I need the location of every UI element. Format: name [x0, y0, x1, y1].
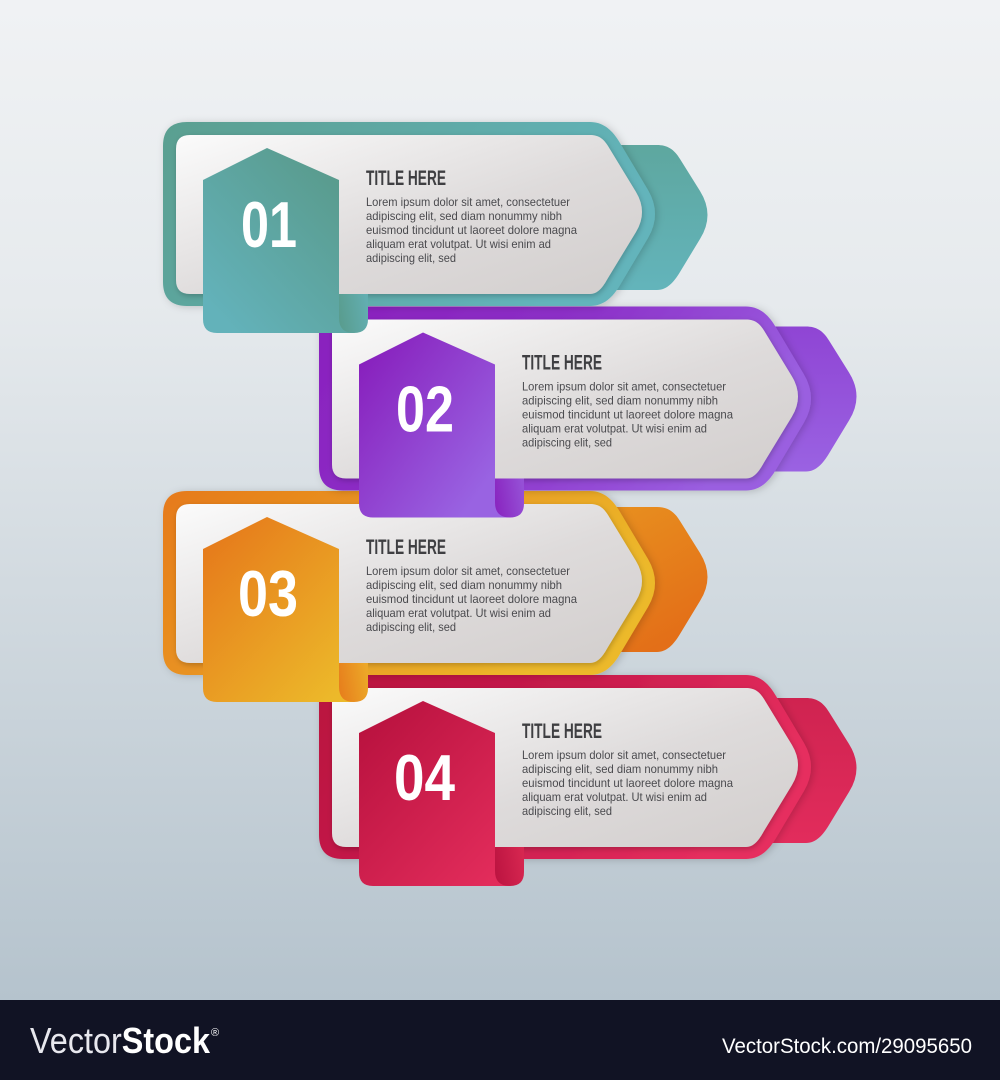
text block 03: adipiscing elit, sed [366, 621, 456, 634]
icon: fold 02 [491, 478, 524, 518]
number 03: 03 [238, 557, 298, 630]
card frame 01 [163, 122, 655, 306]
badge 04 [359, 701, 510, 886]
text block 04: adipiscing elit, sed diam nonummy nibh [522, 763, 718, 776]
text block 04: aliquam erat volutpat. Ut wisi enim ad [522, 791, 707, 804]
text block 02: adipiscing elit, sed diam nonummy nibh [522, 394, 718, 408]
icon: fold 03 [335, 663, 368, 702]
arrow: back chevron 03 [605, 507, 708, 652]
number 02: 02 [396, 372, 454, 446]
text block 01: adipiscing elit, sed [366, 252, 456, 265]
text block 04: euismod tincidunt ut laoreet dolore magna [522, 777, 734, 790]
icon: fold 04 [491, 847, 524, 886]
footer url: VectorStock.com/29095650 [722, 1035, 972, 1058]
card frame 03 [163, 491, 655, 675]
text block 02: aliquam erat volutpat. Ut wisi enim ad [522, 422, 707, 436]
number 04: 04 [394, 741, 455, 814]
text block 04: Lorem ipsum dolor sit amet, consectetuer [522, 749, 726, 762]
badge 01 [203, 148, 354, 333]
card body 03 [176, 504, 642, 663]
heading 01: TITLE HERE [366, 167, 446, 190]
icon: fold 01 [335, 294, 368, 333]
badge 02 [359, 332, 510, 518]
text block 01: aliquam erat volutpat. Ut wisi enim ad [366, 238, 551, 251]
text block 01 [366, 196, 578, 265]
text block 02: euismod tincidunt ut laoreet dolore magna [522, 408, 734, 422]
card body 04 [332, 688, 798, 847]
text block 02: Lorem ipsum dolor sit amet, consectetuer [522, 380, 726, 394]
number 01: 01 [241, 188, 297, 261]
footer bar [0, 1000, 1000, 1080]
card frame 02 [319, 306, 811, 490]
panel: step 02 [319, 306, 856, 518]
arrow: back chevron 01 [605, 145, 708, 290]
card body 02 [332, 320, 798, 478]
text block 03: aliquam erat volutpat. Ut wisi enim ad [366, 607, 551, 620]
text block 04: adipiscing elit, sed [522, 805, 612, 818]
arrow: back chevron 04 [761, 698, 856, 843]
panel: step 04 [319, 675, 856, 886]
card body 01 [176, 135, 642, 294]
text block 03: adipiscing elit, sed diam nonummy nibh [366, 579, 562, 592]
text block 04 [522, 749, 734, 818]
text block 03 [366, 565, 578, 634]
text block 02 [522, 380, 734, 450]
heading 03: TITLE HERE [366, 536, 446, 559]
text block 03: Lorem ipsum dolor sit amet, consectetuer [366, 565, 570, 578]
arrow: back chevron 02 [761, 326, 856, 472]
heading 04: TITLE HERE [522, 720, 602, 743]
text block 03: euismod tincidunt ut laoreet dolore magna [366, 593, 578, 606]
text block 01: adipiscing elit, sed diam nonummy nibh [366, 210, 562, 223]
badge 03 [203, 517, 354, 702]
heading 02: TITLE HERE [522, 352, 602, 374]
card frame 04 [319, 675, 811, 859]
text block 01: Lorem ipsum dolor sit amet, consectetuer [366, 196, 570, 209]
text block 02: adipiscing elit, sed [522, 436, 612, 450]
panel: step 01 [163, 122, 708, 333]
panel: step 03 [163, 491, 708, 702]
text block 01: euismod tincidunt ut laoreet dolore magna [366, 224, 578, 237]
footer logo: VectorStock [30, 1020, 211, 1061]
footer registered mark: ® [211, 1027, 219, 1039]
